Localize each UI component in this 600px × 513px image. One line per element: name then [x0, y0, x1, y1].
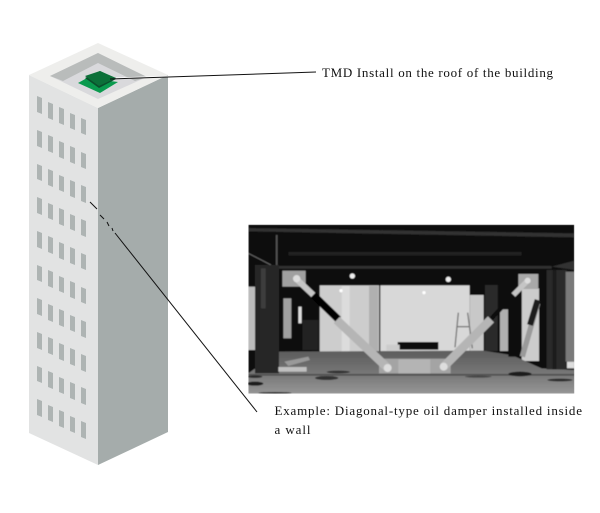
right wall: [98, 75, 168, 465]
leader line to TMD: [110, 71, 316, 79]
icon: green TMD on roof: [78, 71, 118, 93]
photo: diagonal oil damper: [247, 225, 574, 394]
roof: [29, 43, 168, 108]
left wall: [29, 75, 98, 465]
label: damper: a wall: [274, 422, 311, 437]
label: damper: Example: Diagonal-type oil damper installed inside: [274, 403, 582, 418]
label: damper: [274, 403, 582, 437]
leader line to damper: [90, 202, 257, 412]
label: TMD: TMD Install on the roof of the building: [322, 65, 554, 80]
windows: [37, 96, 86, 439]
building: [29, 43, 168, 465]
